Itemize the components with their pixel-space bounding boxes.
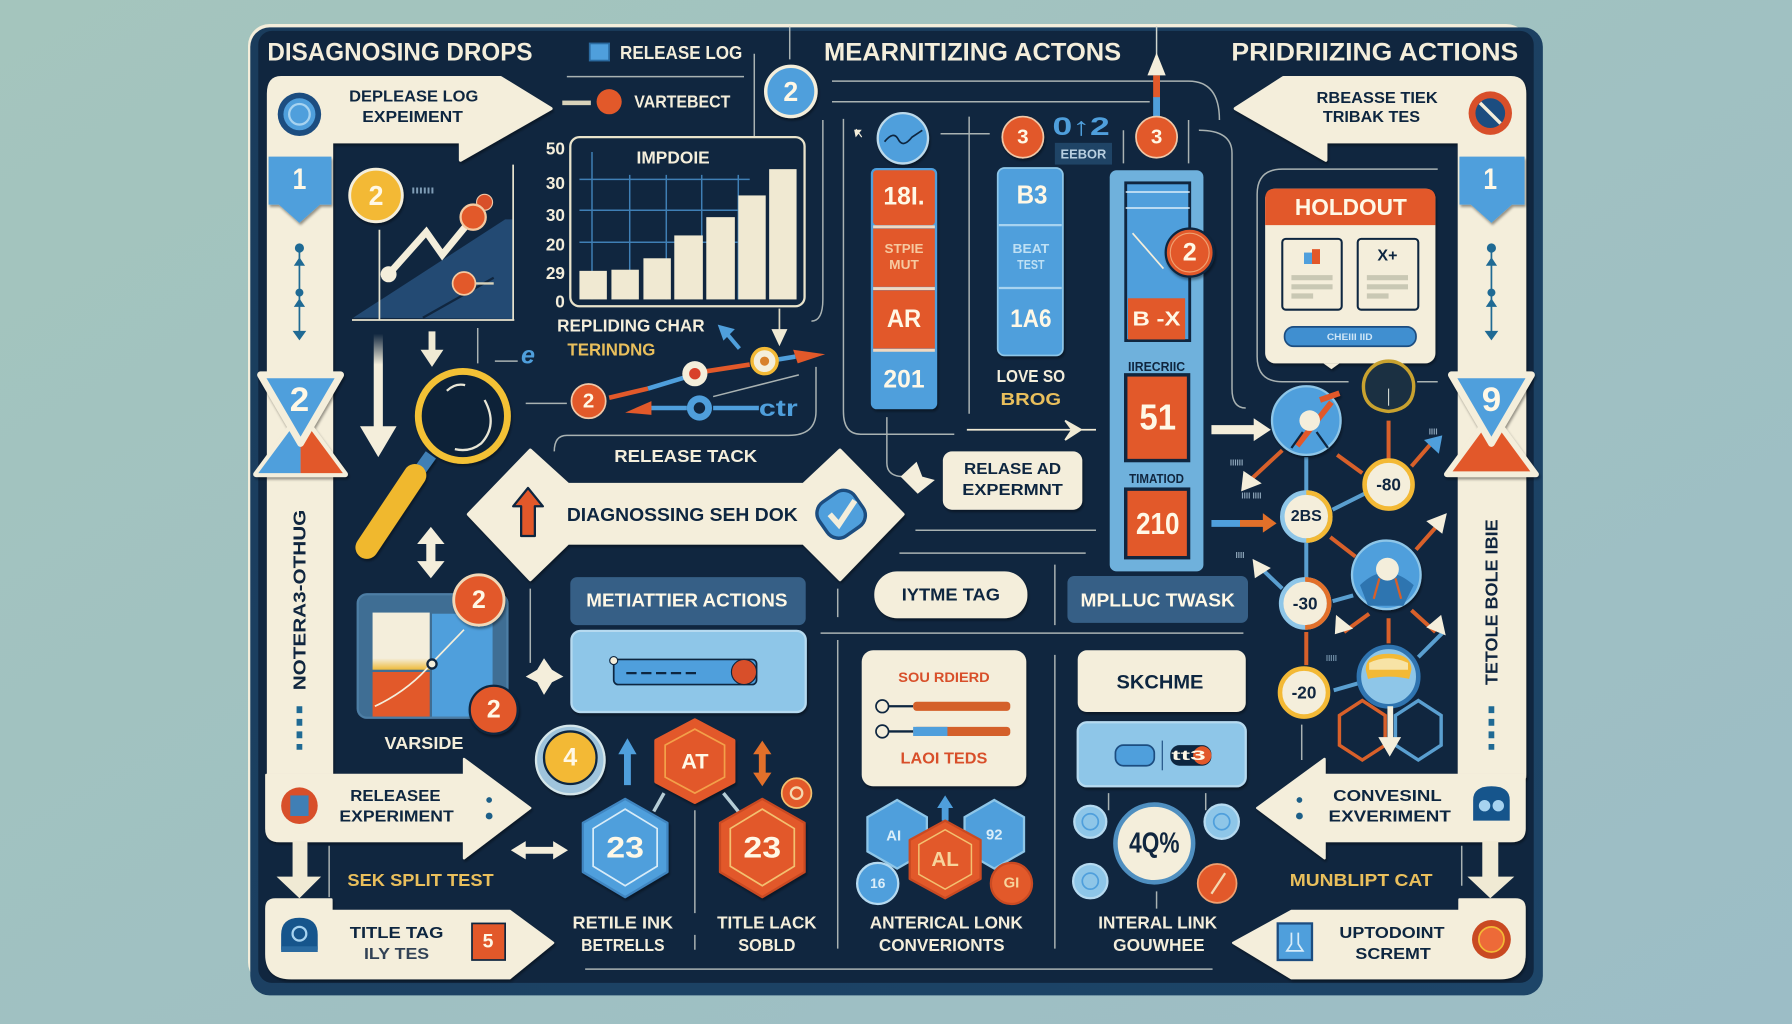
- diagnosing banner: DIAGNOSSING SEH DOK: [567, 504, 799, 525]
- arrow: double vertical: [417, 527, 445, 578]
- icon: lock dial: [281, 918, 318, 952]
- column 2 stacked: B3: [1017, 179, 1047, 209]
- uptodoint label: UPTODOINT: [1339, 925, 1445, 942]
- icon: check badge: [812, 485, 871, 544]
- bar chart: 30: [546, 205, 565, 225]
- column 1 stacked: 18I.: [883, 183, 925, 211]
- varteect legend: VARTEBECT: [634, 92, 731, 112]
- arrow: network down: [1378, 706, 1401, 757]
- arrow: short down: [421, 331, 443, 367]
- column 2 stacked: TEST: [1017, 258, 1045, 272]
- node -80: [1365, 461, 1413, 509]
- orange badge 3: 3: [1017, 126, 1029, 149]
- diamond pointer 2: [901, 462, 935, 494]
- release ad box: EXPERMNT: [962, 482, 1063, 499]
- orange badge on column: [1166, 229, 1214, 277]
- release experiment arrow: [266, 759, 530, 858]
- release tack label: RELEASE TACK: [614, 446, 758, 466]
- label: love so: LOVE SO: [997, 366, 1065, 386]
- heading: prioritizing actions: PRIDRIIZING ACTIONS: [1231, 39, 1518, 67]
- hexagon cluster: 16: [870, 876, 886, 891]
- yellow coin 4: 4: [563, 744, 577, 772]
- network diagram: IIIIII: [1230, 458, 1243, 467]
- node 2BS: 2BS: [1291, 508, 1322, 525]
- orange hexagon 23: [720, 799, 805, 897]
- diagnosing banner: [469, 450, 903, 579]
- sou rdierd card: [862, 650, 1026, 786]
- conversion label: [1329, 788, 1451, 826]
- down connector right: [1467, 841, 1514, 898]
- column 1 stacked: 201: [883, 365, 925, 393]
- spider node top: [1272, 386, 1341, 455]
- sek split test: SEK SPLIT TEST: [347, 870, 494, 890]
- skchme card: SKCHME: [1117, 671, 1203, 693]
- label: retile ink: RETILE INK: [573, 912, 674, 932]
- column 3 panel: IIRECRIIC: [1128, 360, 1185, 374]
- top left arrow label: EXPEIMENT: [362, 109, 463, 126]
- blue hexagon 23: [583, 799, 667, 897]
- hexagon cluster: GI: [1004, 875, 1019, 891]
- right connector dots: [1486, 244, 1497, 339]
- arrow: horizontal double: [511, 841, 568, 859]
- column 3 panel: 210: [1136, 506, 1179, 541]
- label: retile ink: BETRELLS: [581, 935, 665, 955]
- left ribbon 1: [269, 157, 331, 223]
- down connector left: [277, 841, 321, 898]
- icon: orange up arrow: [513, 488, 543, 536]
- node -30: [1281, 579, 1329, 627]
- gauge node: [1359, 647, 1418, 706]
- orange hexagon AT: [656, 720, 734, 802]
- node 2BS: [1282, 493, 1330, 541]
- progress bar two: [876, 725, 1010, 738]
- node -20: [1280, 669, 1328, 717]
- column 3 panel: TIMATIOD: [1129, 472, 1184, 486]
- conversion experiment arrow: [1257, 759, 1525, 858]
- holdout button: CHEIII IID: [1327, 332, 1373, 342]
- line chart panel: [352, 165, 514, 320]
- arrow: orange double: [753, 741, 771, 786]
- right hourglass badge 9: [1447, 375, 1536, 474]
- spider node bottom: [1352, 541, 1421, 609]
- column 1 stacked: [871, 168, 937, 409]
- top left arrow label: DEPLEASE LOG: [349, 89, 478, 106]
- label: title lack: SOBLD: [738, 935, 795, 955]
- network diagram: IIII: [1236, 551, 1244, 560]
- metiattier actions header: METIATTIER ACTIONS: [586, 589, 787, 610]
- column 3 panel: 51: [1139, 397, 1176, 438]
- blue badge 2: 2: [783, 76, 798, 107]
- yellow badge 2: 2: [369, 180, 383, 211]
- flow diagram: ctr: [759, 395, 798, 421]
- arrow: blue up: [618, 738, 637, 785]
- hex connectors: [654, 793, 738, 811]
- left hourglass badge 2: 2: [290, 381, 309, 419]
- main dark panel: [248, 24, 1543, 995]
- label: love so: BROG: [1001, 389, 1061, 409]
- label: anterical lonk: [870, 912, 1023, 955]
- hexagon cluster: AL: [931, 848, 959, 871]
- outline hexagons: [1339, 701, 1441, 760]
- label: anterical lonk: CONVERIONTS: [879, 935, 1005, 955]
- orange square 5: [472, 923, 505, 960]
- right vertical rail text: TETOLE BOLE IBIE: [1481, 519, 1501, 685]
- sou rdierd card: LAOI TEDS: [901, 750, 988, 767]
- bar chart: 20: [546, 235, 565, 255]
- top left arrow label: [349, 89, 478, 126]
- slider card: [571, 631, 806, 712]
- right ribbon 1: 1: [1483, 163, 1497, 196]
- blue glyph tag: EEBOR: [1061, 147, 1106, 161]
- node -30: -30: [1293, 593, 1318, 613]
- skchme card: [1078, 650, 1246, 712]
- label: love so: [997, 366, 1065, 409]
- column 1 stacked: AR: [887, 305, 921, 333]
- blue square icon: [1278, 923, 1312, 960]
- percent dial: 4Q%: [1129, 827, 1179, 859]
- heading: mearnitizing actions: MEARNITIZING ACTONS: [824, 39, 1121, 67]
- connector lines: [329, 26, 1462, 969]
- orange hexagon AT: AT: [681, 749, 709, 774]
- variant a: [1282, 239, 1342, 310]
- left ribbon 1: 1: [293, 163, 306, 196]
- uptodoint label: [1339, 925, 1445, 963]
- top right arrow label: RBEASSE TIEK: [1317, 90, 1438, 107]
- hexagon cluster: AI: [886, 829, 901, 845]
- icon: release badge: [281, 787, 318, 824]
- iytme tag pill: IYTME TAG: [902, 584, 1000, 604]
- hexagon cluster: [857, 795, 1032, 904]
- hexagon cluster: 92: [986, 827, 1003, 843]
- uptodoint label: SCREMT: [1355, 946, 1431, 963]
- title tag label: TITLE TAG: [350, 925, 443, 942]
- arrow: long down: [360, 334, 397, 457]
- orange badge bottom: 2: [487, 696, 501, 724]
- column 2 stacked: 1A6: [1010, 305, 1051, 333]
- munblipt cat: MUNBLIPT CAT: [1290, 870, 1433, 890]
- network diagram: IIII: [1429, 428, 1438, 436]
- right hourglass badge 9: 9: [1482, 381, 1501, 419]
- right ribbon 1: [1459, 157, 1525, 223]
- arrow: horizontal to column: [967, 421, 1096, 440]
- uptodoint arrow: [1233, 899, 1525, 978]
- varside label: VARSIDE: [385, 733, 463, 753]
- network diagram: IIII IIII: [1241, 492, 1261, 500]
- release arrow label: RELEASEE: [350, 788, 441, 805]
- left vertical rail text: NOTERA3-OTHUG: [289, 510, 309, 690]
- progress bar one: [876, 700, 1010, 713]
- orange badge top: 2: [472, 586, 486, 614]
- diamond pointer: [526, 658, 563, 695]
- node -80: -80: [1376, 475, 1401, 495]
- release arrow label: EXPERIMENT: [339, 809, 454, 826]
- orange badge on column: 2: [1183, 239, 1197, 267]
- chart caption: REPLIDING CHAR: [557, 316, 705, 336]
- orange hexagon 23: 23: [743, 832, 781, 864]
- title tag label: ILY TES: [364, 946, 429, 963]
- yellow coin 4: [536, 726, 605, 794]
- heading: release log legend: RELEASE LOG: [620, 42, 742, 63]
- orange badge top: [454, 575, 504, 625]
- sou rdierd card: SOU RDIERD: [898, 670, 990, 685]
- variant b: X+: [1377, 247, 1397, 264]
- percent dial: [1073, 805, 1239, 903]
- icon: blue target: [278, 93, 321, 136]
- blue badge 2: [766, 66, 816, 117]
- blue pill card: [1078, 722, 1246, 786]
- icon: conversion robot: [1473, 786, 1510, 821]
- chart caption: [557, 316, 705, 360]
- network diagram: [1211, 361, 1447, 760]
- title tag arrow: [266, 899, 553, 978]
- variant b: [1358, 239, 1418, 310]
- holdout button: [1285, 327, 1416, 346]
- release ad box: RELASE AD: [964, 461, 1061, 478]
- holdout card: [1265, 189, 1435, 369]
- bar chart: 29: [546, 263, 565, 283]
- flow diagram: [521, 309, 825, 421]
- column 3 panel: [1110, 170, 1203, 571]
- network diagram: IIIII: [1326, 654, 1337, 663]
- orange badge bottom: [470, 686, 518, 734]
- mplluc twask header: [1067, 576, 1248, 623]
- left frame with top arrow: [269, 78, 551, 777]
- line chart panel: IIIIII: [411, 186, 434, 195]
- mplluc twask header: MPLLUC TWASK: [1081, 589, 1236, 610]
- orange square 5: 5: [483, 931, 494, 953]
- bar chart: IMPDOIE: [637, 148, 710, 168]
- label: anterical lonk: ANTERICAL LONK: [870, 912, 1023, 932]
- bar chart: 0: [555, 292, 565, 312]
- yellow badge 2: [350, 169, 402, 222]
- title tag label: [350, 925, 443, 963]
- bar chart: 50: [546, 139, 565, 159]
- label: interal link: GOUWHEE: [1113, 935, 1205, 955]
- label: interal link: [1098, 912, 1218, 955]
- column 1 stacked: MUT: [889, 258, 919, 272]
- label: title lack: [717, 912, 817, 955]
- flow diagram: 2: [583, 390, 594, 413]
- left connector dots: [294, 244, 305, 339]
- varteect legend: [562, 89, 731, 114]
- variance chart: [358, 594, 507, 718]
- conversion label: EXVERIMENT: [1329, 809, 1451, 826]
- top arrow with badge: [1136, 26, 1177, 158]
- bar chart: [546, 137, 805, 312]
- node -20: -20: [1292, 683, 1316, 703]
- flow diagram: e: [521, 341, 535, 369]
- blue circle scribble: [878, 113, 928, 163]
- label: interal link: INTERAL LINK: [1098, 912, 1218, 932]
- release arrow label: [339, 788, 454, 826]
- right frame with top arrow: [1235, 78, 1525, 777]
- top right arrow label: TRIBAK TES: [1323, 109, 1420, 126]
- column 2 stacked: BEAT: [1013, 242, 1050, 256]
- icon: prohibited badge: [1469, 91, 1512, 135]
- blue glyph tag: 0↑2: [1053, 113, 1110, 141]
- blue hexagon 23: 23: [606, 832, 644, 864]
- holdout card: HOLDOUT: [1295, 194, 1407, 220]
- heading: diagnosing drops: DISAGNOSING DROPS: [267, 39, 533, 67]
- chart caption: TERINDNG: [567, 340, 655, 360]
- small orange dot: [782, 778, 811, 808]
- orange badge 3: [1002, 117, 1043, 158]
- icon: magnifying glass: [367, 371, 507, 547]
- top right arrow label: [1317, 90, 1438, 126]
- top arrow with badge: 3: [1151, 126, 1162, 149]
- blue glyph tag: [1053, 113, 1112, 165]
- column 3 panel: B -X: [1133, 307, 1181, 330]
- label: retile ink: [573, 912, 674, 955]
- blue pill card: tt3: [1171, 748, 1206, 763]
- small pointer: [855, 129, 862, 137]
- conversion label: CONVESINL: [1333, 788, 1442, 805]
- metiattier actions header: [570, 577, 806, 625]
- left hourglass badge 2: [256, 375, 345, 474]
- column 1 stacked: STPIE: [885, 242, 923, 256]
- column 2 stacked: [998, 168, 1063, 355]
- label: title lack: TITLE LACK: [717, 912, 817, 932]
- bar chart: 30: [546, 173, 565, 193]
- release ad box: [943, 451, 1082, 510]
- iytme tag pill: [874, 571, 1027, 618]
- orange target icon: [1472, 920, 1511, 959]
